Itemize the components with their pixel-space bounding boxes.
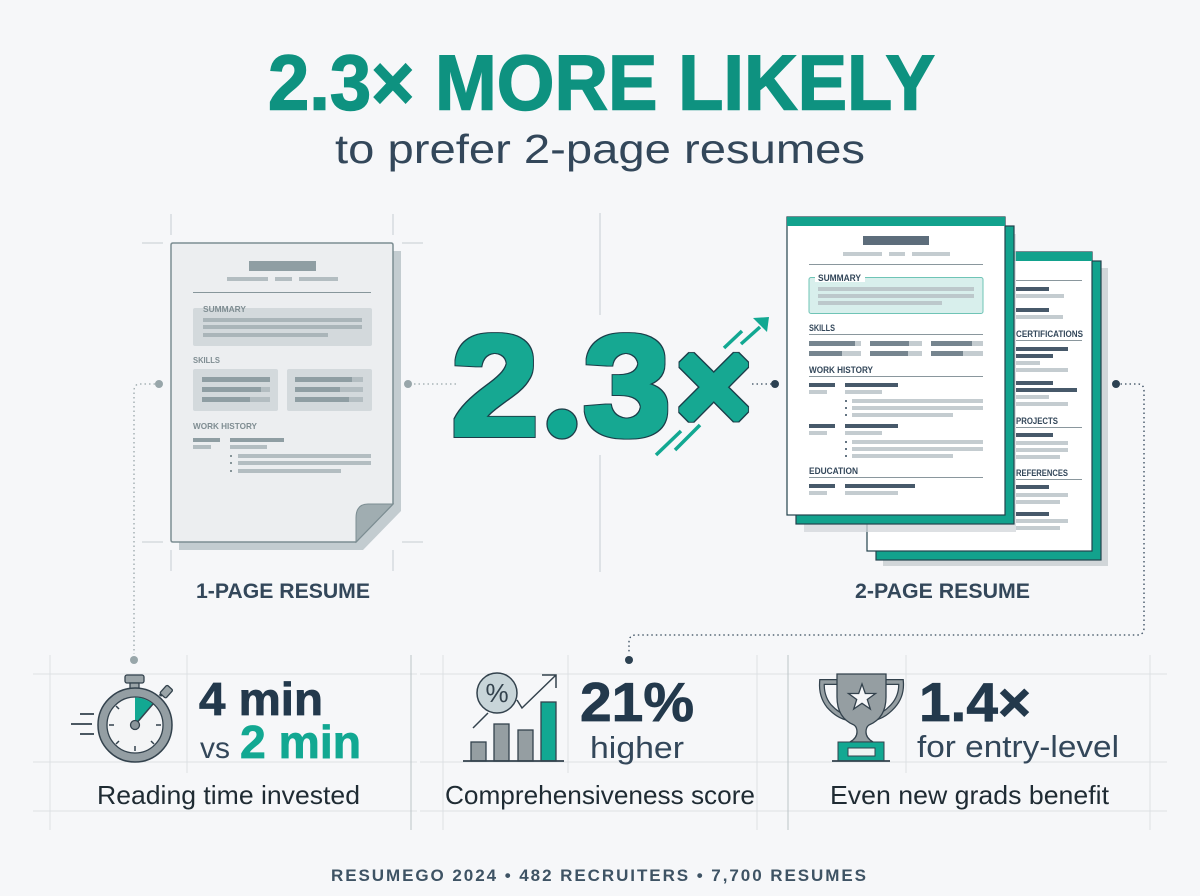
label: work history: WORK HISTORY [193,421,257,431]
connector: 1-page to stopwatch [130,380,163,664]
back page [867,252,1108,566]
stat: 21%: 21% [580,671,694,733]
caption: Reading time invested [97,780,360,810]
caption: Even new grads benefit [830,780,1110,810]
icon: page fold [356,504,393,542]
center stat: 2.3x: . [548,341,576,453]
connector: 1-page to stat [404,380,458,388]
label: 2-page resume: 2-PAGE RESUME [855,580,1030,603]
center stat: 2.3x: 3 [583,307,671,466]
label: skills: SKILLS [809,323,835,333]
connector: 2-page to score [625,380,1144,664]
front page [787,217,1016,532]
title: 2.3× MORE LIKELY [268,38,935,126]
icon: trophy [822,674,901,761]
center stat: 2.3x: 2 [451,307,539,466]
footer source line: RESUMEGO 2024 • 482 RECRUITERS • 7,700 RESUMES [331,866,866,885]
label: summary: SUMMARY [203,304,246,314]
icon: bar chart with percent magnifier: % [485,678,509,708]
label: certifications: CERTIFICATIONS [1016,329,1083,339]
panel: reading time stat [71,673,361,810]
label: projects: PROJECTS [1016,416,1058,426]
connector: stat to 2-page [752,380,779,388]
icon: bar chart with percent magnifier [463,673,564,761]
center stat: 2.3x [451,307,769,466]
stat: higher: higher [590,730,684,765]
label: 1-page resume: 1-PAGE RESUME [196,580,370,603]
label: references: REFERENCES [1016,468,1068,478]
label: work history: WORK HISTORY [809,365,873,375]
panel: 1-page resume [171,243,401,550]
caption: Comprehensiveness score [445,780,755,810]
stat: 1.4x: 1.4× [919,671,1031,733]
panel: 2-page resume [787,217,1108,566]
panel: reading time stat: 2 min [240,716,361,768]
icon: upward arrow and speed lines [656,327,760,455]
label: education: EDUCATION [809,466,858,476]
panel: entry-level stat [822,671,1119,810]
icon: stopwatch [71,675,173,762]
multiplication sign: × [676,312,752,458]
stat: vs 2 min: vs [200,732,230,765]
panel: comprehensiveness stat [445,671,755,810]
stat: for entry-level: for entry-level [917,729,1119,764]
subtitle: to prefer 2-page resumes [335,126,865,172]
label: skills: SKILLS [193,355,220,365]
callout: summary highlight: SUMMARY [818,273,861,283]
stat: 4 min: 4 min [199,673,323,725]
callout: summary highlight [809,272,983,314]
